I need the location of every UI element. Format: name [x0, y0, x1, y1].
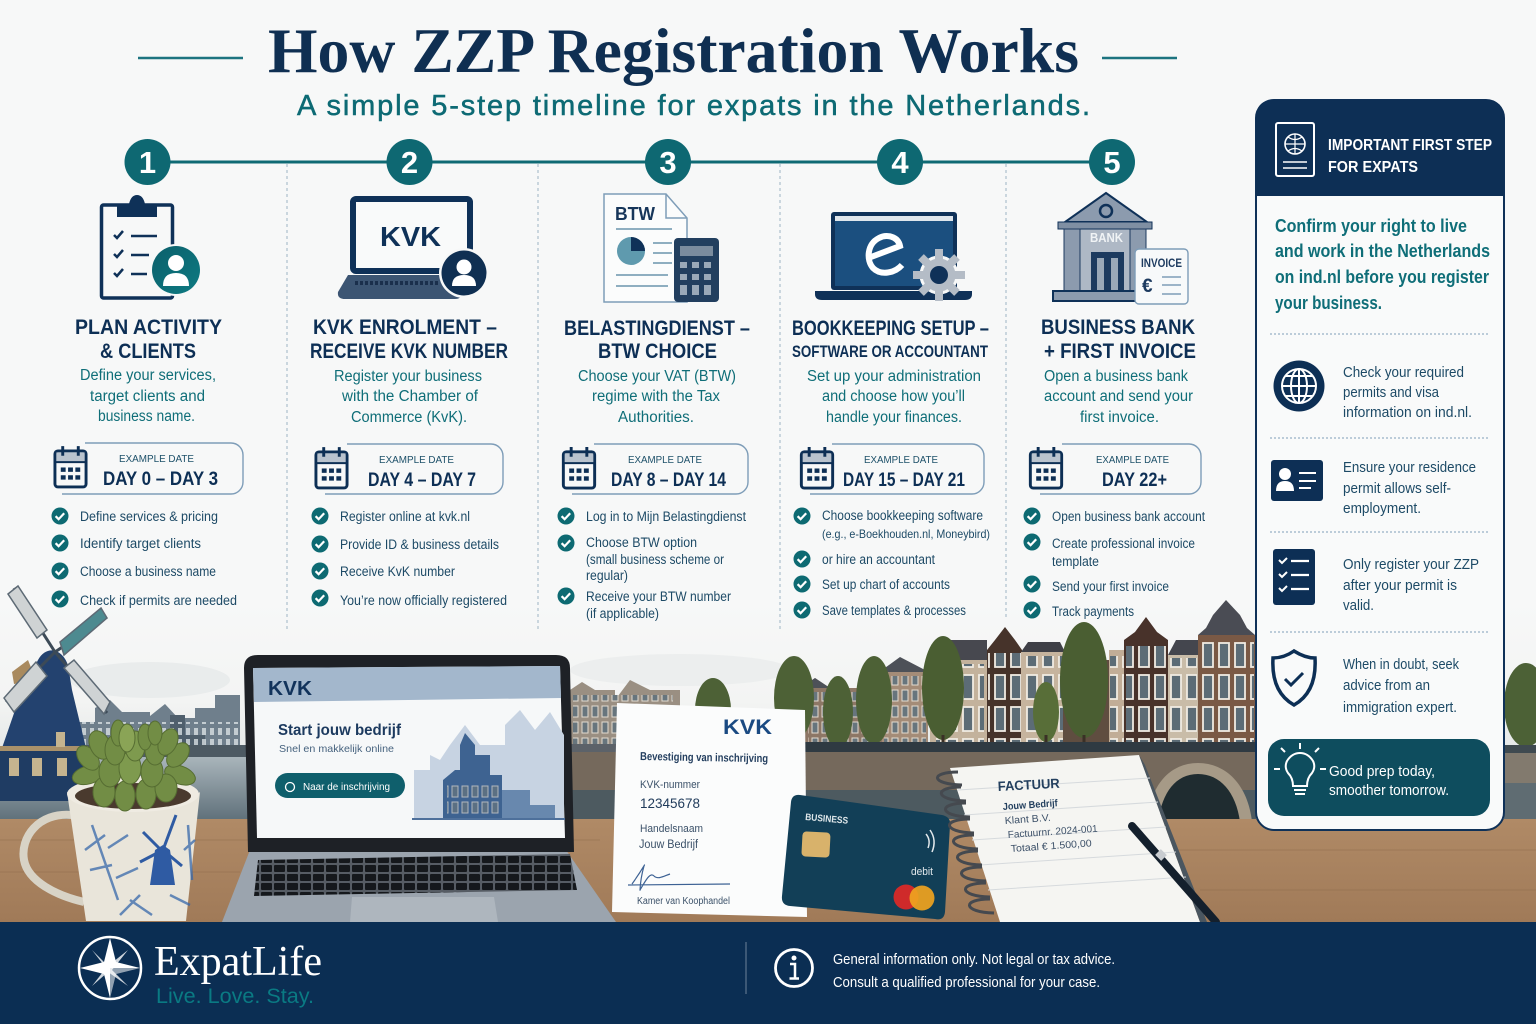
middle distant skyline — [570, 656, 928, 750]
illustration: invoice notebook: Jouw Bedrijf — [1002, 798, 1059, 813]
callout: good prep: smoother tomorrow. — [1329, 783, 1449, 799]
checklist: Register online at kvk.nl — [340, 509, 470, 524]
description: Define your services, — [80, 367, 216, 384]
timeline with numbered steps: 2 — [401, 145, 418, 180]
key message: Confirm your right to live — [1275, 216, 1467, 236]
description: account and send your — [1044, 388, 1193, 405]
description: first invoice. — [1080, 409, 1159, 426]
illustration: business debit card: BUSINESS — [805, 812, 849, 827]
example date — [801, 444, 984, 494]
delft decoration — [85, 815, 195, 915]
item: register ZZP after permit: after your permit is — [1343, 578, 1457, 594]
left distant skyline — [0, 695, 250, 822]
illustration: invoice notebook: FACTUUR — [997, 776, 1060, 794]
step 2 panel — [310, 199, 508, 608]
heading: KVK ENROLMENT – — [313, 316, 497, 339]
disclaimer: Consult a qualified professional for your case. — [833, 974, 1100, 991]
description: Register your business — [334, 368, 482, 385]
item: check permits: information on ind.nl. — [1343, 405, 1472, 421]
illustration: windmill — [0, 586, 110, 801]
checklist: Choose a business name — [80, 564, 216, 579]
example date — [55, 443, 243, 494]
subtitle: A simple 5-step timeline for expats in the Netherlands. — [297, 90, 1090, 122]
checklist — [558, 508, 746, 621]
icon: passport — [1276, 123, 1314, 176]
disclaimer — [833, 951, 1115, 991]
illustration: KVK registration letter: KVK-nummer — [640, 779, 700, 791]
checklist: Identify target clients — [80, 536, 201, 551]
item: register ZZP after permit — [1273, 549, 1479, 614]
description — [578, 368, 736, 426]
description — [807, 368, 981, 426]
checklist: (small business scheme or — [586, 552, 724, 567]
example date: EXAMPLE DATE — [379, 454, 454, 466]
example date: DAY 22+ — [1102, 470, 1167, 491]
illustration: KVK registration letter: KVK — [723, 716, 772, 739]
checklist — [794, 508, 990, 618]
example date: EXAMPLE DATE — [1096, 454, 1169, 466]
brand name: ExpatLife — [154, 939, 322, 985]
checklist: Send your first invoice — [1052, 579, 1169, 594]
checklist: Define services & pricing — [80, 509, 218, 524]
laptop screen: Start jouw bedrijf — [278, 722, 402, 739]
callout: good prep: Good prep today, — [1329, 764, 1435, 780]
invoice card — [1135, 249, 1188, 304]
heading — [310, 316, 508, 363]
illustration: business debit card: debit — [911, 866, 933, 878]
heading: BELASTINGDIENST – — [564, 317, 750, 340]
laptop screen: Snel en makkelijk online — [279, 743, 394, 755]
timeline with numbered steps: 4 — [891, 145, 909, 180]
notebook spiral — [937, 772, 994, 913]
icon: shield — [1273, 651, 1315, 705]
illustration: KVK registration letter — [612, 703, 807, 917]
button — [275, 773, 405, 798]
timeline with numbered steps: 3 — [659, 145, 677, 180]
timeline with numbered steps: 1 — [139, 145, 156, 180]
icon: checklist — [1273, 549, 1315, 605]
heading: PLAN ACTIVITY — [75, 316, 222, 339]
illustration: invoice notebook — [937, 755, 1216, 922]
illustration: KVK registration letter: Jouw Bedrijf — [639, 839, 699, 851]
checklist: regular) — [586, 568, 628, 583]
invoice card: INVOICE — [1141, 258, 1182, 270]
checklist — [52, 508, 237, 608]
description: regime with the Tax — [592, 388, 720, 405]
description: Open a business bank — [1044, 368, 1188, 385]
example date: EXAMPLE DATE — [119, 453, 194, 465]
panel header — [1256, 100, 1504, 196]
item: residence permit: permit allows self- — [1343, 481, 1451, 497]
description: Commerce (KvK). — [351, 409, 467, 426]
key message: and work in the Netherlands — [1275, 241, 1490, 261]
heading: SOFTWARE OR ACCOUNTANT — [792, 342, 988, 361]
description: Authorities. — [618, 409, 694, 426]
item: check permits — [1274, 360, 1472, 421]
illustration: KVK registration letter: Bevestiging van inschrijving — [640, 751, 768, 765]
step 5 panel — [1024, 193, 1205, 619]
checklist: Save templates & processes — [822, 603, 966, 618]
succulent plant — [70, 720, 198, 811]
example date: DAY 15 – DAY 21 — [843, 470, 965, 491]
canal wall, railing and water — [570, 742, 1256, 822]
illustration: mug with succulent — [23, 720, 200, 921]
checklist: You’re now officially registered — [340, 593, 507, 608]
heading — [75, 316, 222, 363]
disclaimer: General information only. Not legal or tax advice. — [833, 951, 1115, 968]
checklist: template — [1052, 554, 1099, 569]
illustration: KVK registration letter: 12345678 — [640, 796, 700, 811]
laptop screen — [253, 666, 565, 838]
canal houses — [922, 600, 1255, 750]
right edge scenery — [1504, 663, 1536, 821]
example date — [316, 444, 503, 494]
item: register ZZP after permit: valid. — [1343, 598, 1374, 614]
item: seek advice: immigration expert. — [1343, 700, 1457, 716]
callout: good prep — [1268, 739, 1490, 816]
heading — [792, 317, 989, 361]
illustration: invoice notebook: Klant B.V. — [1004, 813, 1051, 827]
item: residence permit — [1271, 460, 1476, 517]
icon: BTW document and calculator: BTW — [615, 204, 655, 224]
description: with the Chamber of — [341, 388, 479, 405]
pen — [1132, 826, 1216, 922]
tagline: Live. Love. Stay. — [156, 985, 314, 1008]
illustration: invoice notebook: Factuurnr. 2024-001 — [1007, 824, 1098, 841]
checklist: (e.g., e-Boekhouden.nl, Moneybird) — [822, 527, 990, 541]
checklist: or hire an accountant — [822, 552, 935, 567]
panel header: IMPORTANT FIRST STEP — [1328, 137, 1492, 154]
wooden table — [0, 819, 1536, 923]
example date: EXAMPLE DATE — [864, 454, 938, 466]
icon: ID card — [1271, 460, 1323, 501]
key message: your business. — [1275, 293, 1382, 313]
checklist — [312, 508, 507, 608]
timeline with numbered steps: 5 — [1103, 145, 1121, 180]
background scene: Amsterdam canal and desk — [0, 600, 1536, 923]
step 1 panel — [52, 195, 243, 608]
description — [1044, 368, 1193, 426]
illustration: KVK registration letter: Handelsnaam — [640, 823, 703, 835]
checklist: Choose BTW option — [586, 535, 697, 550]
laptop screen: KVK — [268, 678, 313, 700]
footer — [0, 922, 1536, 1024]
gear — [913, 249, 965, 301]
heading: & CLIENTS — [100, 340, 196, 363]
illustration: invoice notebook: Totaal € 1.500,00 — [1010, 838, 1092, 855]
item: register ZZP after permit: Only register your ZZP — [1343, 557, 1479, 573]
heading: BTW CHOICE — [598, 340, 717, 363]
step 3 panel — [558, 194, 750, 621]
side panel: important first step for expats — [1256, 100, 1504, 830]
checklist: Open business bank account — [1052, 509, 1205, 524]
checklist: Create professional invoice — [1052, 536, 1195, 551]
checklist: Receive your BTW number — [586, 589, 731, 604]
skyline illustration — [412, 710, 565, 820]
checklist: Track payments — [1052, 604, 1134, 619]
item: seek advice: advice from an — [1343, 678, 1430, 694]
icon: globe — [1274, 360, 1324, 412]
item: check permits: Check your required — [1343, 365, 1464, 381]
example date: DAY 0 – DAY 3 — [103, 469, 218, 490]
checklist: (if applicable) — [586, 606, 659, 621]
icon: KVK laptop with person — [338, 199, 489, 299]
description: Choose your VAT (BTW) — [578, 368, 736, 385]
example date: DAY 4 – DAY 7 — [368, 470, 476, 491]
heading: + FIRST INVOICE — [1044, 340, 1196, 363]
e logo — [869, 236, 902, 273]
panel header: FOR EXPATS — [1328, 159, 1418, 176]
checklist: Choose bookkeeping software — [822, 508, 983, 523]
description — [334, 368, 482, 426]
description: and choose how you’ll — [822, 388, 965, 405]
heading: BOOKKEEPING SETUP – — [792, 317, 989, 340]
checklist: Log in to Mijn Belastingdienst — [586, 509, 746, 524]
icon: BTW document and calculator — [604, 194, 719, 302]
heading — [564, 317, 750, 363]
checklist: Receive KvK number — [340, 564, 455, 579]
example date — [563, 444, 748, 494]
checklist: Check if permits are needed — [80, 593, 237, 608]
title: How ZZP Registration Works — [268, 15, 1079, 86]
item: residence permit: employment. — [1343, 501, 1421, 517]
example date: DAY 8 – DAY 14 — [611, 470, 726, 491]
icon: bank with invoice — [1053, 193, 1188, 304]
invoice card: € — [1142, 276, 1153, 297]
timeline with numbered steps — [124, 139, 1135, 630]
illustration: KVK registration letter: Kamer van Koophandel — [637, 896, 730, 907]
key message — [1275, 216, 1490, 313]
logo: ExpatLife compass — [79, 937, 141, 999]
icon: clipboard with person — [102, 195, 202, 298]
icon: bank with invoice: BANK — [1090, 230, 1124, 245]
illustration: business debit card — [782, 795, 950, 919]
description: handle your finances. — [826, 409, 962, 426]
icon: info — [776, 950, 812, 986]
example date: EXAMPLE DATE — [628, 454, 702, 466]
checklist — [1024, 508, 1205, 619]
icon: bookkeeping laptop with gear — [815, 212, 972, 301]
icon: light bulb — [1274, 743, 1326, 794]
step 4 panel — [792, 212, 990, 618]
example date — [1030, 444, 1201, 494]
checklist: Set up chart of accounts — [822, 577, 950, 592]
heading — [1041, 316, 1196, 363]
button: Naar de inschrijving — [303, 782, 390, 793]
heading: BUSINESS BANK — [1041, 316, 1195, 339]
description: target clients and — [90, 388, 205, 405]
item: seek advice: When in doubt, seek — [1343, 657, 1460, 673]
description — [80, 367, 216, 425]
item: seek advice — [1273, 651, 1460, 716]
heading: RECEIVE KVK NUMBER — [310, 340, 508, 363]
item: check permits: permits and visa — [1343, 385, 1440, 401]
icon: KVK laptop with person: KVK — [380, 221, 441, 252]
key message: on ind.nl before you register — [1275, 267, 1489, 287]
description: Set up your administration — [807, 368, 981, 385]
description: business name. — [98, 408, 195, 425]
item: residence permit: Ensure your residence — [1343, 460, 1476, 476]
illustration: laptop with KVK website — [222, 655, 616, 922]
checklist: Provide ID & business details — [340, 537, 499, 552]
